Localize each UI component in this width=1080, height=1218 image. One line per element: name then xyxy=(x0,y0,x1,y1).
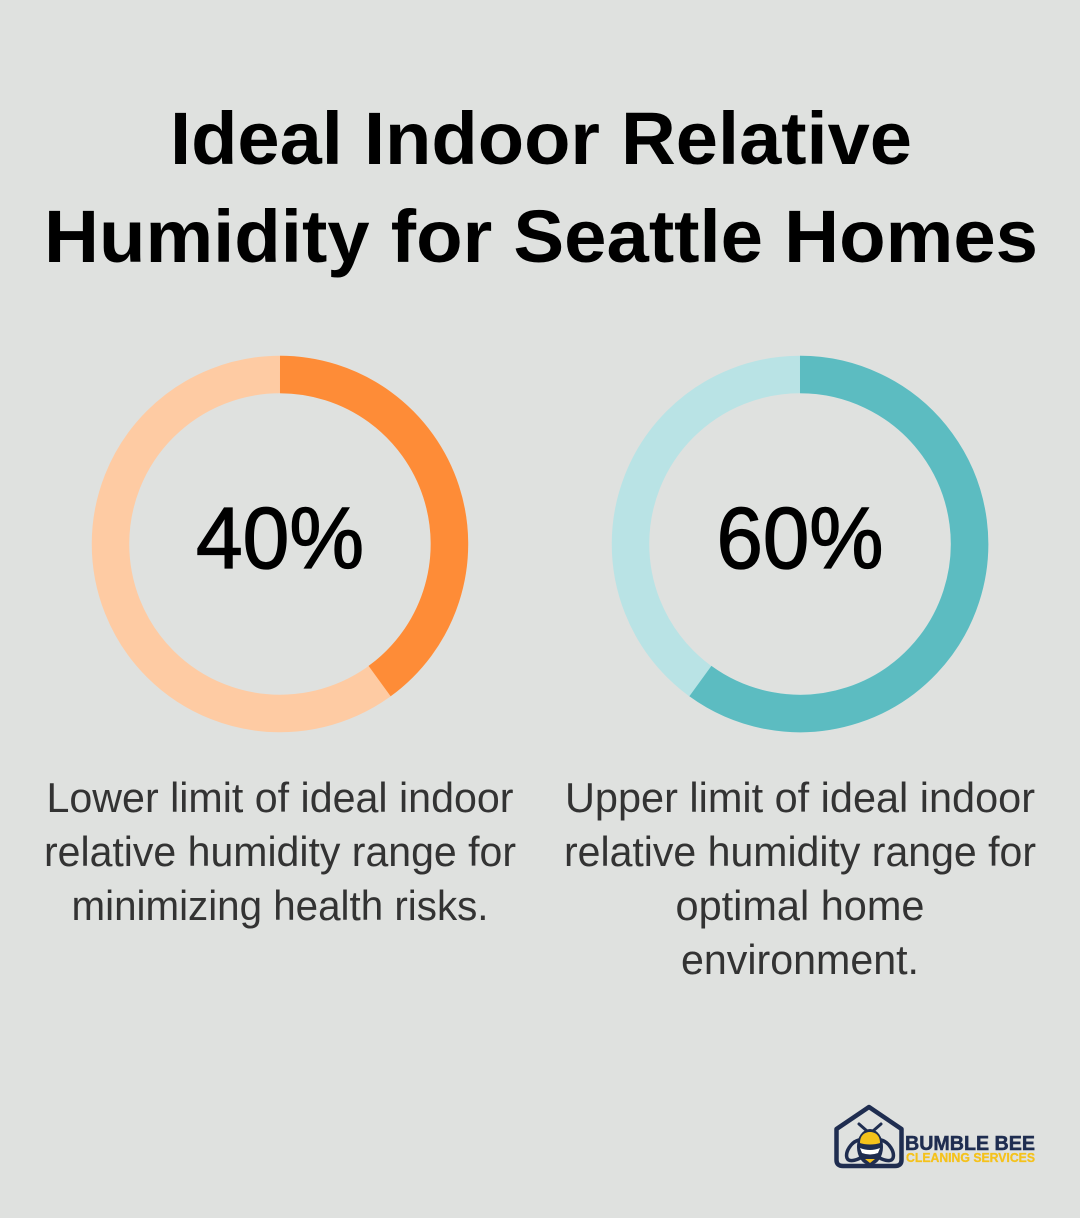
title: Humidity for Seattle Homes xyxy=(44,195,1038,278)
value: 40%: 40% xyxy=(196,490,364,587)
description: lower limit xyxy=(44,774,516,929)
description: lower limit: Lower limit of ideal indoor xyxy=(46,774,514,821)
title xyxy=(44,97,1038,278)
description: upper limit xyxy=(564,774,1036,983)
icon: bee in house xyxy=(836,1107,902,1166)
logo: Bumble Bee Cleaning Services xyxy=(836,1107,1035,1166)
donut chart: 60% xyxy=(630,374,970,714)
title: Ideal Indoor Relative xyxy=(170,97,912,180)
description: upper limit: relative humidity range for xyxy=(564,828,1036,875)
donut chart: 40% xyxy=(110,374,450,714)
description: lower limit: relative humidity range for xyxy=(44,828,516,875)
logo text: BUMBLE BEE xyxy=(905,1132,1035,1155)
description: upper limit: Upper limit of ideal indoor xyxy=(565,774,1035,821)
value: 60%: 60% xyxy=(716,490,884,587)
panel: lower limit 40% xyxy=(44,374,516,929)
description: lower limit: minimizing health risks. xyxy=(72,882,488,929)
logo text xyxy=(905,1132,1035,1165)
description: upper limit: environment. xyxy=(681,936,919,983)
panel: upper limit 60% xyxy=(564,374,1036,983)
description: upper limit: optimal home xyxy=(676,882,924,929)
logo text: CLEANING SERVICES xyxy=(906,1151,1035,1165)
